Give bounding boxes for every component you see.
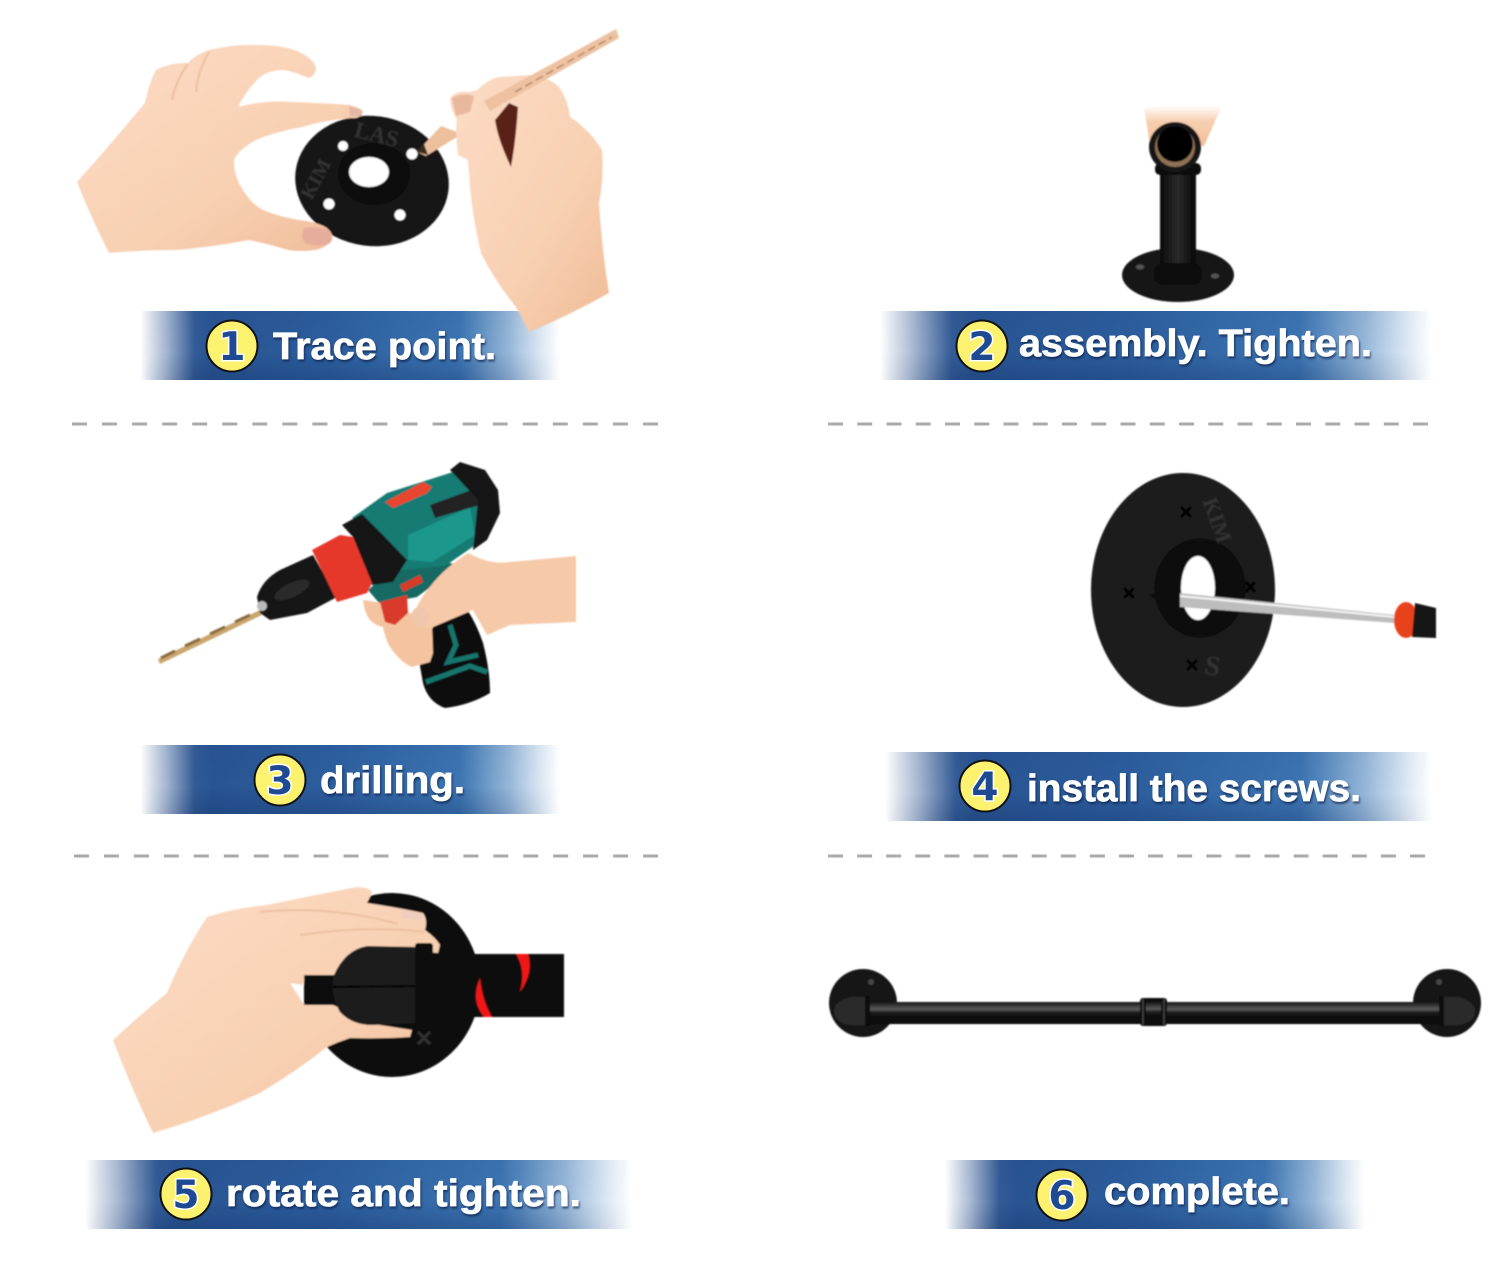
divider row 1 left xyxy=(72,422,658,426)
banner: step 5: rotate and tighten. xyxy=(226,1173,581,1215)
image: finished pipe towel bar xyxy=(829,969,1481,1037)
image: screwdriver driving screws into flange xyxy=(1091,473,1436,707)
banner: step 2: 2 xyxy=(968,325,996,370)
panel: step 5 rotate and tighten xyxy=(85,887,632,1229)
image: screwdriver driving screws into flange: S xyxy=(1202,650,1223,683)
panel: step 3 drilling xyxy=(140,462,576,814)
banner: step 1: Trace point. xyxy=(273,326,496,368)
panel: step 4 install the screws xyxy=(885,473,1436,821)
image: screwdriver driving screws into flange: KIM xyxy=(1198,494,1237,546)
image: hand holding cordless drill xyxy=(158,462,576,708)
banner: step 6 xyxy=(945,1160,1365,1229)
banner: step 3: drilling. xyxy=(320,760,465,802)
banner: step 6: 6 xyxy=(1048,1174,1076,1219)
banner: step 1: 1 xyxy=(218,325,246,370)
image: hands marking a floor flange with a pencil: KIM xyxy=(297,155,336,203)
banner: step 5: 5 xyxy=(172,1173,200,1218)
panel: step 2 assembly xyxy=(880,105,1432,380)
banner: step 1 xyxy=(140,311,560,380)
banner: step 4 xyxy=(885,752,1432,821)
divider row 2 left xyxy=(74,854,658,858)
banner: step 4: 4 xyxy=(971,765,999,810)
banner: step 4: install the screws. xyxy=(1027,768,1361,810)
banner: step 2: assembly. Tighten. xyxy=(1019,323,1372,365)
banner: step 3 xyxy=(140,745,560,814)
image: hands marking a floor flange with a pencil xyxy=(77,29,619,332)
divider row 2 right xyxy=(828,854,1425,858)
banner: step 5 xyxy=(85,1160,632,1229)
image: pipe assembled onto flange held by hand xyxy=(1122,105,1234,302)
panel: step 6 complete xyxy=(829,969,1481,1229)
banner: step 3: 3 xyxy=(266,759,294,804)
panel: step 1 trace point xyxy=(77,29,619,380)
image: hands marking a floor flange with a pencil: LAS xyxy=(352,117,401,152)
banner: step 6: complete. xyxy=(1104,1171,1290,1213)
banner: step 2 xyxy=(880,311,1432,380)
image: hand rotating pipe elbow on flange xyxy=(113,887,564,1133)
divider row 1 right xyxy=(828,422,1428,426)
